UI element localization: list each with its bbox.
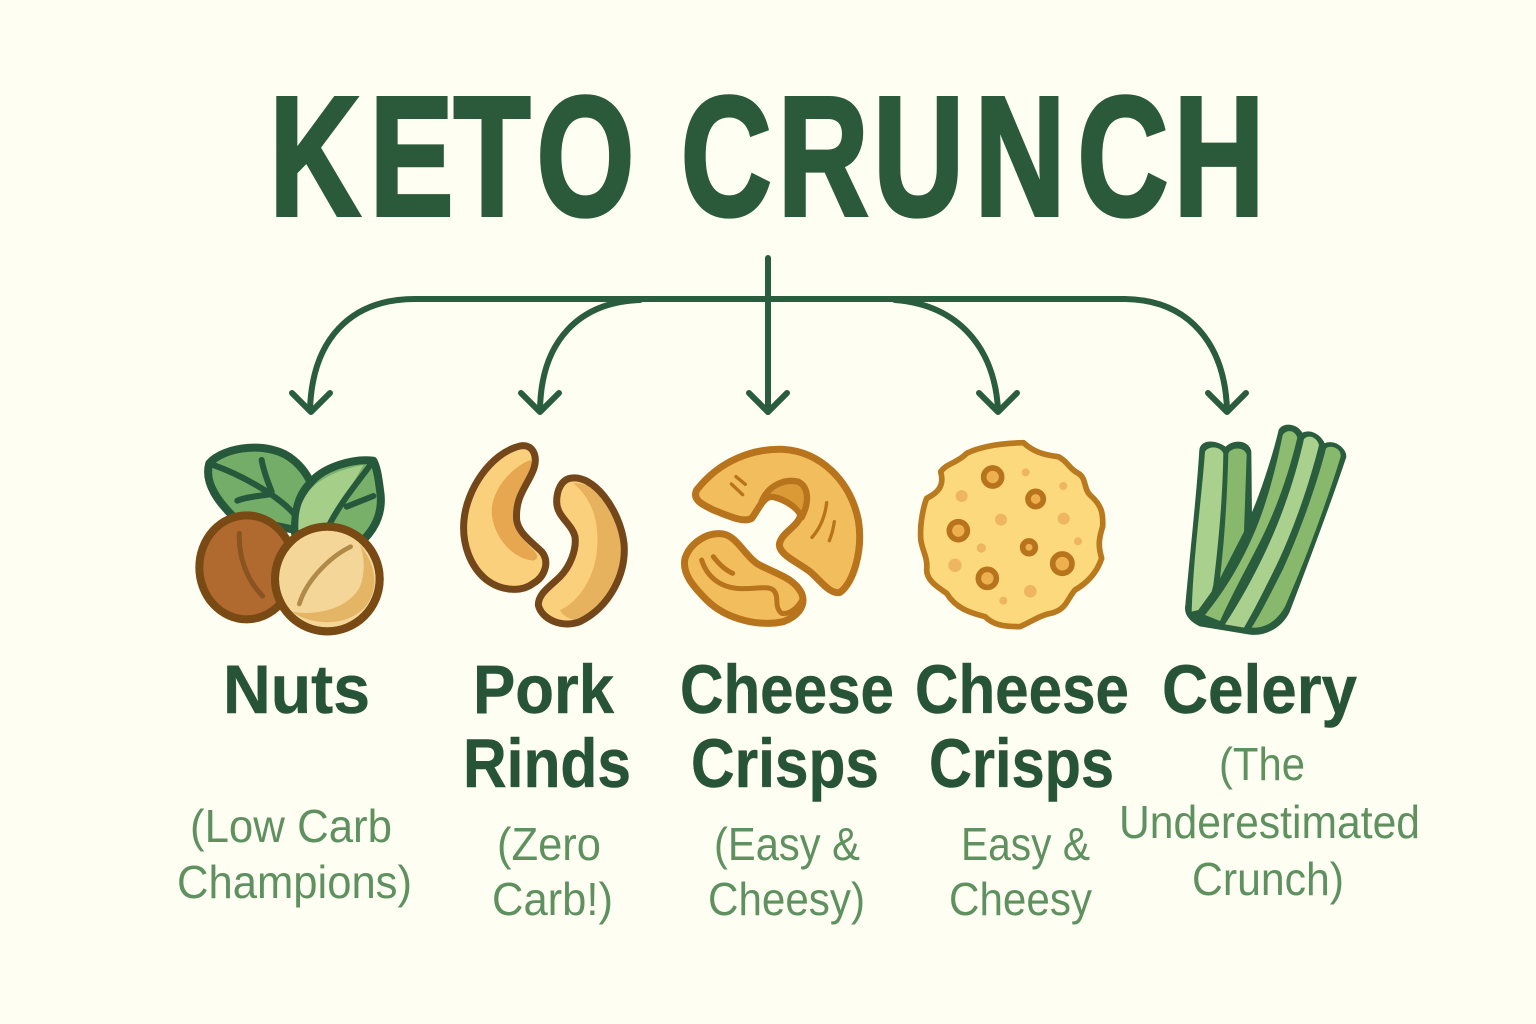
label: nuts: Nuts <box>223 651 370 728</box>
label: cheese crisps, easy and cheesy in brackets: Cheese <box>680 651 894 728</box>
label: cheese crisps, easy and cheesy: Easy & <box>961 818 1090 870</box>
label: nuts <box>177 651 412 908</box>
icon: nuts with leaves <box>199 448 381 631</box>
label: pork rinds: Rinds <box>463 725 631 802</box>
label: nuts: Champions) <box>177 856 412 908</box>
label: celery: Celery <box>1162 651 1357 728</box>
title: KETO CRUNCH <box>269 62 1264 251</box>
label: celery: (The <box>1219 738 1305 790</box>
label: cheese crisps, easy and cheesy <box>915 651 1129 925</box>
label: cheese crisps, easy and cheesy: Crisps <box>929 725 1114 802</box>
label: pork rinds <box>463 651 631 925</box>
label: pork rinds: Carb!) <box>492 873 613 925</box>
label: pork rinds: Pork <box>473 651 615 728</box>
icon: round cheese cracker <box>921 443 1103 627</box>
label: celery: Crunch) <box>1192 853 1344 905</box>
branching arrows from title to five snacks <box>292 258 1246 412</box>
label: cheese crisps, easy and cheesy in brackets: Crisps <box>691 725 879 802</box>
label: nuts: (Low Carb <box>190 800 392 852</box>
label: cheese crisps, easy and cheesy in brackets: (Easy & <box>714 818 860 870</box>
label: cheese crisps, easy and cheesy in brackets <box>680 651 894 925</box>
label: cheese crisps, easy and cheesy in brackets: Cheesy) <box>708 873 865 925</box>
label: celery <box>1119 651 1420 905</box>
icon: celery stalks <box>1186 426 1345 634</box>
label: pork rinds: (Zero <box>497 818 601 870</box>
label: cheese crisps, easy and cheesy: Cheesy <box>949 873 1092 925</box>
label: cheese crisps, easy and cheesy: Cheese <box>915 651 1129 728</box>
label: celery: Underestimated <box>1119 796 1420 848</box>
icon: pork rinds <box>464 446 624 624</box>
icon: curled cheese crisps <box>684 449 860 623</box>
